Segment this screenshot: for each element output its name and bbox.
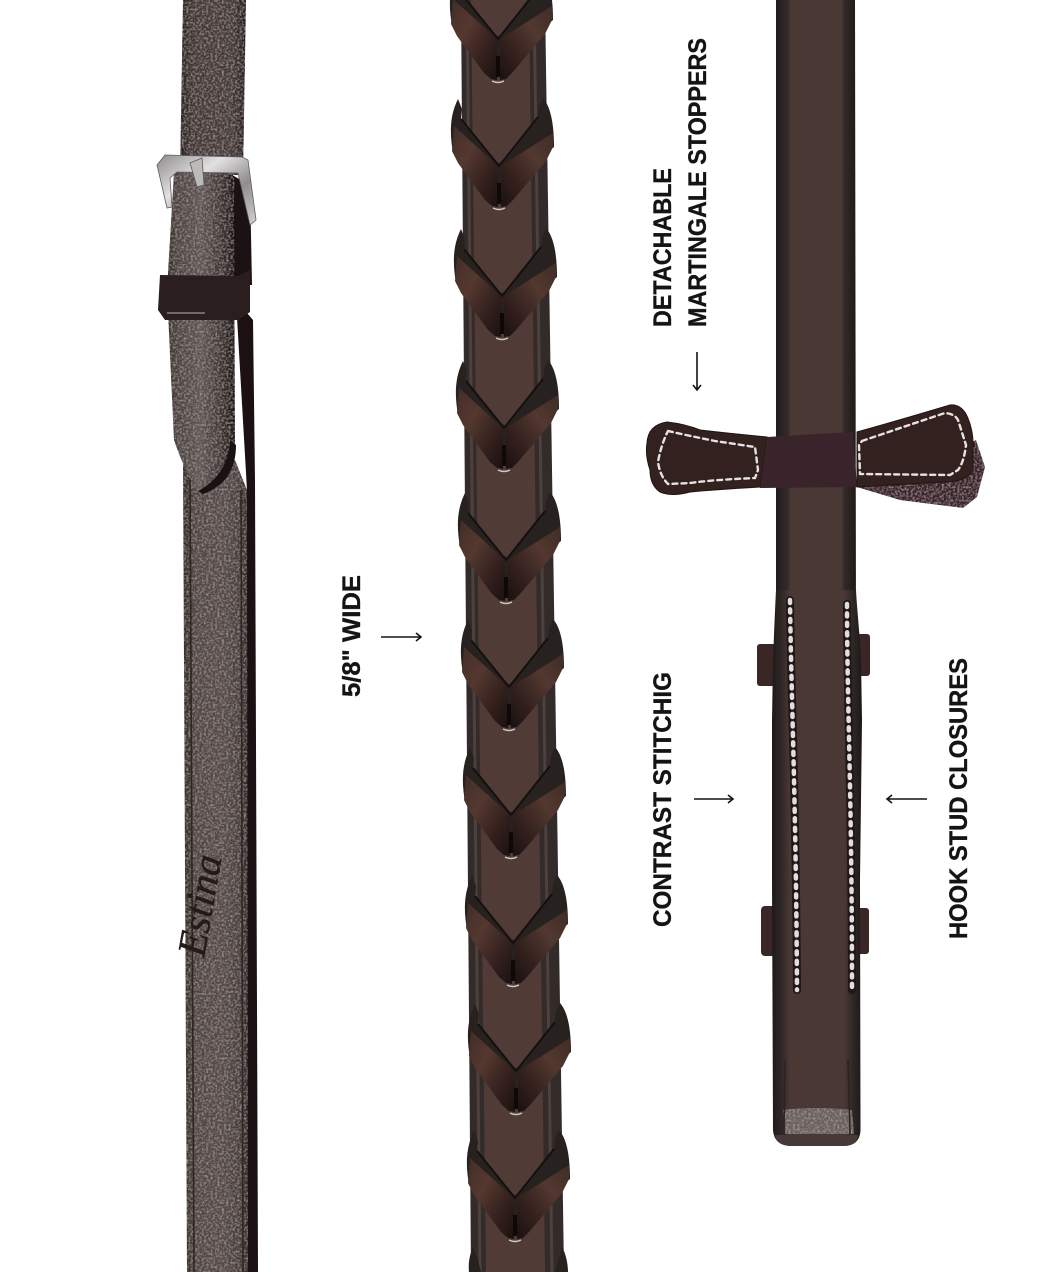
brand emboss: Estina: [168, 851, 231, 961]
center band: [760, 432, 857, 488]
left flap: [646, 422, 767, 494]
keeper highlight: [167, 312, 205, 314]
partial lacing at bottom edge: [469, 1247, 568, 1272]
buckle tongue strap: [167, 172, 235, 491]
contrast stitching: [790, 600, 852, 990]
label: detachable martingale stoppers: [649, 38, 712, 327]
arrow: down to stopper: [693, 352, 701, 390]
lower strap with embossed lines: [183, 460, 248, 1272]
dark strap behind tongue: [232, 175, 252, 285]
upper strap: [180, 0, 246, 175]
strap center: [471, 0, 545, 1272]
lower strap: [772, 590, 862, 1146]
strap keeper: [158, 270, 250, 320]
buckle: [157, 155, 256, 225]
buckle pin: [190, 158, 204, 187]
label: detachable martingale stoppers: DETACHABLE: [649, 168, 677, 327]
loop highlight: [775, 1060, 858, 1146]
tongue tip shadow: [198, 440, 236, 494]
panel: laced strap: [450, 0, 571, 1272]
panel: strap with stoppers and stitching: [646, 0, 985, 1146]
upper strap: [776, 0, 856, 640]
arrow: to stitching: [694, 795, 733, 803]
stopper stitching: [658, 413, 966, 484]
dark strap edge: [236, 300, 258, 1272]
label: contrast stitching: CONTRAST STITCHIG: [649, 672, 677, 927]
right flap: [857, 405, 973, 487]
arrow: to hook studs: [887, 795, 927, 803]
label: width: 5/8" WIDE: [338, 575, 366, 697]
fuzzy underside: [857, 440, 985, 508]
label: hook stud closures: HOOK STUD CLOSURES: [945, 658, 973, 939]
arrow: to laced strap: [381, 633, 421, 641]
chevron lacing: [450, 0, 571, 1272]
side tabs: [757, 634, 870, 956]
panel: plain strap with buckle: [157, 0, 258, 1272]
label: detachable martingale stoppers: MARTINGALE STOPPERS: [684, 38, 712, 327]
strap body: [461, 0, 564, 1272]
detachable stopper: [646, 405, 985, 508]
